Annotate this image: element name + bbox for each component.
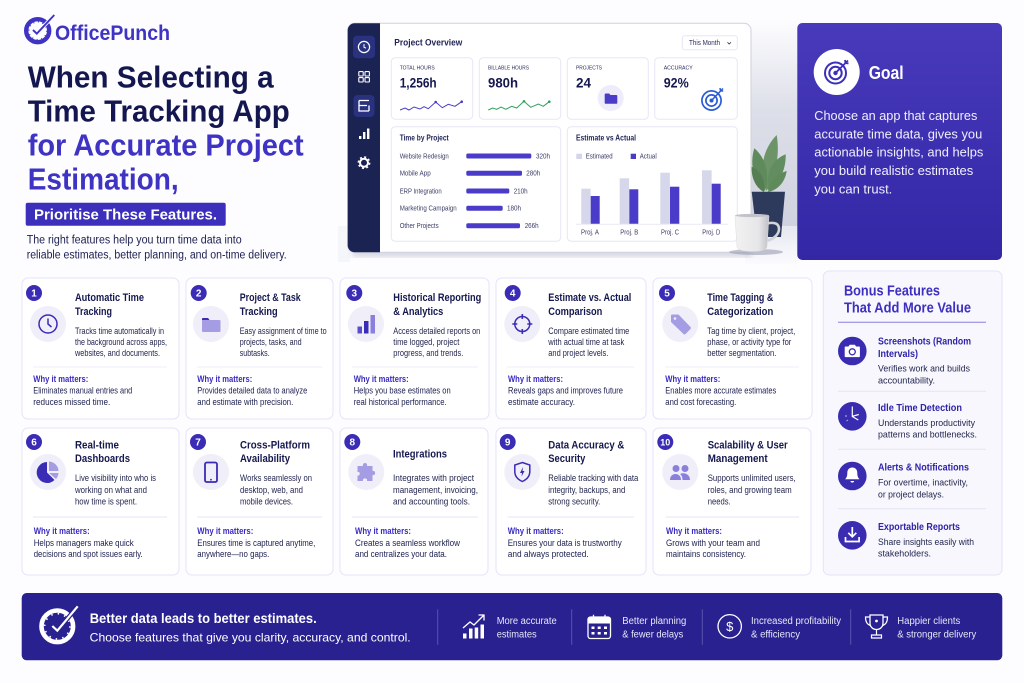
feature card 6: real-time dashboards: Real-time	[75, 440, 119, 452]
feature card 7: cross-platform: Availability	[240, 453, 291, 465]
feature card 2: project and task tracking: Why it matters:	[197, 374, 252, 384]
feature card 5: time tagging: phase, or activity type for	[707, 337, 791, 347]
panel: goal	[797, 23, 1002, 260]
feature card 2: project and task tracking: 2	[196, 288, 202, 300]
feature card 6: real-time dashboards: how time is spent.	[75, 496, 137, 506]
feature card 7: cross-platform: anywhere—no gaps.	[197, 549, 269, 559]
feature card 5: time tagging: Tag time by client, project,	[707, 326, 795, 336]
feature card 2: project and task tracking: Project & Task	[240, 292, 301, 304]
feature card 8: integrations: Integrations	[393, 449, 447, 461]
feature card 1: automatic time tracking: Tracks time automatically in	[75, 326, 164, 336]
feature card 8: integrations: and centralizes your data.	[355, 549, 447, 559]
feature card 6: real-time dashboards: Why it matters:	[34, 526, 90, 536]
feature card 5: time tagging: 5	[664, 288, 670, 300]
feature card 9: data accuracy and security: 9	[505, 438, 511, 448]
chart: estimate vs actual: Proj. A	[581, 229, 599, 236]
bonus item: idle time detection	[838, 402, 977, 440]
feature card 5: time tagging	[653, 278, 812, 419]
chart: estimate vs actual: Proj. B	[620, 229, 639, 236]
feature card 4: estimate vs actual: 4	[510, 288, 516, 300]
feature card 3: historical reporting: Helps you base estimates on	[354, 386, 451, 396]
footer message	[90, 611, 411, 645]
feature card 10: scalability and user management: 10	[660, 438, 670, 448]
bonus item: screenshots	[838, 336, 971, 386]
panel: goal: you build realistic estimates	[814, 163, 974, 178]
icon: goal target	[814, 49, 860, 95]
feature card 6: real-time dashboards: Live visibility into who is	[75, 473, 157, 483]
feature card 7: cross-platform: Cross-Platform	[240, 440, 310, 452]
feature card 7: cross-platform: 7	[195, 438, 201, 448]
chart: time by project: 320h	[536, 153, 550, 160]
feature card 2: project and task tracking: Tracking	[240, 306, 278, 318]
subtitle badge: Prioritise These Features.	[34, 206, 217, 223]
footer banner	[22, 593, 1002, 660]
feature card 10: scalability and user management: Why it matters:	[666, 526, 722, 536]
feature card 7: cross-platform	[186, 428, 333, 575]
KPI: accuracy: 92%	[664, 75, 689, 91]
panel: bonus features	[823, 271, 1002, 575]
feature card 4: estimate vs actual: with actual time at task	[547, 337, 625, 347]
KPI: billable hours	[479, 58, 561, 119]
title: Time Tracking App	[28, 94, 290, 129]
feature card 2: project and task tracking: and estimate with precision.	[197, 397, 293, 407]
feature card 6: real-time dashboards: decisions and spot issues early.	[34, 549, 143, 559]
KPI: billable hours: 980h	[488, 75, 518, 91]
chart: estimate vs actual: Proj. C	[661, 229, 679, 236]
benefit: increased profitability: $	[726, 619, 734, 634]
feature card 1: automatic time tracking: reduces missed time.	[33, 397, 110, 407]
feature card 6: real-time dashboards: Helps managers make quick	[34, 538, 134, 548]
dashboard header: Project Overview	[394, 38, 463, 48]
chart: estimate vs actual	[567, 127, 737, 241]
feature card 3: historical reporting	[340, 278, 489, 419]
KPI: billable hours: BILLABLE HOURS	[488, 66, 529, 72]
feature card 2: project and task tracking: subtasks.	[240, 348, 270, 358]
benefit: better planning: & fewer delays	[622, 630, 683, 641]
feature card 10: scalability and user management: maintains consistency.	[666, 549, 746, 559]
benefit: happier clients	[866, 615, 976, 641]
feature card 8: integrations: Integrates with project	[393, 473, 475, 483]
KPI: projects: PROJECTS	[576, 66, 602, 72]
feature card 10: scalability and user management: roles, and growing team	[708, 485, 792, 495]
feature card 6: real-time dashboards	[22, 428, 179, 575]
sidebar	[348, 23, 380, 252]
KPI: total hours: 1,256h	[400, 75, 437, 91]
feature card 5: time tagging: Categorization	[707, 306, 774, 318]
panel: goal: actionable insights, and helps	[814, 145, 984, 160]
benefit: increased profitability	[718, 615, 841, 641]
chart: time by project: Mobile App	[400, 171, 431, 178]
feature card 10: scalability and user management: Grows with your team and	[666, 538, 760, 548]
chart: time by project: Marketing Campaign	[400, 206, 457, 213]
feature card 5: time tagging: Time Tagging &	[707, 292, 773, 304]
feature card 8: integrations: Creates a seamless workflow	[355, 538, 460, 548]
chart: time by project: Time by Project	[400, 133, 449, 143]
feature card 9: data accuracy and security: integrity, backups, and	[548, 485, 625, 495]
logo: OfficePunch	[26, 15, 170, 45]
bonus item: idle time detection: Idle Time Detection	[878, 403, 962, 414]
bonus heading	[844, 284, 971, 316]
feature card 8: integrations: management, invoicing,	[393, 485, 478, 495]
feature card 2: project and task tracking	[186, 278, 333, 419]
feature card 10: scalability and user management	[653, 428, 811, 575]
bonus item: alerts	[838, 462, 969, 499]
benefit: increased profitability: Increased profitability	[751, 616, 841, 627]
icon: clock check	[42, 606, 78, 642]
feature card 9: data accuracy and security: Reliable tracking with data	[548, 473, 638, 483]
feature card 3: historical reporting: & Analytics	[393, 306, 443, 318]
title: for Accurate Project	[28, 128, 304, 163]
bonus item: alerts: Alerts & Notifications	[878, 462, 969, 473]
chart: time by project: 210h	[514, 188, 528, 195]
chart: time by project: 180h	[507, 206, 521, 213]
feature card 6: real-time dashboards: 6	[31, 438, 37, 448]
footer message: Choose features that give you clarity, accuracy, and control.	[90, 631, 411, 645]
chart: estimate vs actual: Estimated	[586, 153, 613, 160]
feature card 10: scalability and user management: Management	[708, 453, 768, 465]
KPI: accuracy: ACCURACY	[664, 66, 693, 72]
KPI: accuracy	[655, 58, 737, 119]
title: When Selecting a	[28, 59, 274, 94]
KPI: projects: 24	[576, 75, 591, 91]
intro text: The right features help you turn time data into	[27, 234, 242, 246]
feature card 1: automatic time tracking: Automatic Time	[75, 292, 144, 304]
feature card 10: scalability and user management: Supports unlimited users,	[708, 473, 796, 483]
bonus item: screenshots: Verifies work and builds	[878, 363, 970, 374]
plant	[752, 135, 787, 237]
KPI: projects	[567, 58, 648, 119]
title: Estimation,	[28, 161, 179, 196]
panel: goal: accurate time data, gives you	[814, 126, 982, 141]
dashboard window	[348, 23, 751, 252]
coffee mug	[729, 214, 783, 255]
chart: time by project: 266h	[525, 223, 539, 230]
benefit: happier clients: & stronger delivery	[897, 630, 976, 641]
feature card 8: integrations: 8	[350, 438, 356, 448]
chart: time by project: Website Redesign	[400, 153, 449, 160]
feature card 3: historical reporting: Why it matters:	[354, 374, 409, 384]
feature card 1: automatic time tracking: Tracking	[75, 306, 112, 318]
KPI: total hours	[391, 58, 473, 119]
bonus item: exportable reports	[838, 521, 974, 559]
feature card 7: cross-platform: Ensures time is captured anytime,	[197, 538, 315, 548]
feature card 5: time tagging: Enables more accurate estimates	[665, 386, 777, 396]
subtitle badge	[26, 203, 226, 226]
intro text: reliable estimates, better planning, and on-time delivery.	[27, 249, 287, 261]
feature card 6: real-time dashboards: working on what and	[74, 485, 147, 495]
chart: time by project	[391, 127, 561, 241]
feature card 1: automatic time tracking: websites, and documents.	[74, 348, 160, 358]
feature card 4: estimate vs actual: Why it matters:	[508, 374, 563, 384]
benefit: better planning: Better planning	[622, 616, 686, 627]
feature card 4: estimate vs actual: Comparison	[548, 306, 603, 318]
feature card 3: historical reporting: real historical performance.	[354, 397, 447, 407]
feature card 7: cross-platform: mobile devices.	[240, 496, 293, 506]
bonus heading: That Add More Value	[844, 300, 971, 316]
bonus item: idle time detection: Understands productivity	[878, 417, 975, 428]
feature card 1: automatic time tracking: 1	[31, 288, 37, 300]
bonus item: screenshots: Intervals)	[878, 349, 918, 360]
feature card 4: estimate vs actual: and project levels.	[548, 348, 608, 358]
feature card 5: time tagging: and cost forecasting.	[665, 397, 736, 407]
feature card 7: cross-platform: Works seamlessly on	[240, 473, 312, 483]
feature card 10: scalability and user management: needs.	[708, 496, 731, 506]
bonus item: exportable reports: stakeholders.	[878, 548, 931, 559]
bonus item: idle time detection: patterns and bottlenecks.	[878, 429, 977, 440]
chart: time by project: ERP Integration	[400, 188, 442, 195]
feature card 1: automatic time tracking: Eliminates manual entries and	[33, 386, 132, 396]
feature card 3: historical reporting: 3	[352, 288, 358, 300]
feature card 8: integrations: Why it matters:	[355, 526, 411, 536]
feature card 4: estimate vs actual: Compare estimated time	[548, 326, 629, 336]
intro text	[27, 234, 287, 261]
chart: time by project: Other Projects	[400, 223, 439, 230]
title	[28, 59, 304, 196]
feature card 4: estimate vs actual	[496, 278, 646, 419]
feature card 7: cross-platform: desktop, web, and	[240, 485, 303, 495]
benefit: more accurate estimates: estimates	[497, 630, 537, 641]
feature card 9: data accuracy and security: Ensures your data is trustworthy	[508, 538, 622, 548]
feature card 3: historical reporting: progress, and trends.	[393, 348, 463, 358]
benefit: happier clients: Happier clients	[897, 616, 960, 627]
chart: estimate vs actual: Proj. D	[702, 229, 720, 236]
footer message: Better data leads to better estimates.	[90, 611, 317, 626]
feature card 2: project and task tracking: projects, tasks, and	[240, 337, 302, 347]
feature card 1: automatic time tracking: the background across apps,	[75, 337, 167, 347]
feature card 4: estimate vs actual: Reveals gaps and improves future	[508, 386, 623, 396]
feature card 1: automatic time tracking: Why it matters:	[33, 374, 88, 384]
panel: goal: Goal	[869, 63, 904, 83]
month dropdown	[682, 36, 737, 50]
logo: OfficePunch: OfficePunch	[55, 22, 170, 45]
bonus item: alerts: For overtime, inactivity,	[878, 476, 968, 487]
feature card 9: data accuracy and security: Security	[548, 453, 586, 465]
bonus item: screenshots: accountability.	[878, 375, 935, 386]
feature card 9: data accuracy and security: and always protected.	[508, 549, 589, 559]
bonus heading: Bonus Features	[844, 284, 940, 300]
chart: time by project: 280h	[526, 171, 540, 178]
feature card 2: project and task tracking: Provides detailed data to analyze	[197, 386, 307, 396]
feature card 3: historical reporting: Historical Reporting	[393, 292, 481, 304]
feature card 9: data accuracy and security: Data Accuracy &	[548, 440, 624, 452]
feature card 8: integrations: and accounting tools.	[393, 496, 470, 506]
benefit: increased profitability: & efficiency	[751, 630, 800, 641]
bonus item: screenshots: Screenshots (Random	[878, 336, 971, 347]
feature card 6: real-time dashboards: Dashboards	[75, 453, 130, 465]
chart: estimate vs actual: Actual	[640, 153, 657, 160]
feature card 8: integrations	[340, 428, 488, 575]
feature card 10: scalability and user management: Scalability & User	[708, 440, 788, 452]
bonus item: exportable reports: Share insights easily with	[878, 536, 974, 547]
feature card 5: time tagging: Why it matters:	[665, 374, 720, 384]
feature card 1: automatic time tracking	[22, 278, 179, 419]
feature card 5: time tagging: better segmentation.	[707, 348, 776, 358]
feature card 3: historical reporting: time logged, project	[393, 337, 460, 347]
panel: goal: you can trust.	[814, 181, 892, 196]
feature card 4: estimate vs actual: Estimate vs. Actual	[548, 292, 631, 304]
benefit: better planning	[588, 615, 686, 641]
panel: goal: Choose an app that captures	[814, 108, 978, 123]
feature card 9: data accuracy and security: Why it matters:	[508, 526, 564, 536]
feature card 4: estimate vs actual: estimate accuracy.	[508, 397, 575, 407]
feature card 7: cross-platform: Why it matters:	[197, 526, 253, 536]
benefit: more accurate estimates: More accurate	[497, 616, 557, 627]
feature card 9: data accuracy and security: strong security.	[548, 496, 600, 506]
benefit: more accurate estimates	[463, 615, 557, 641]
feature card 9: data accuracy and security	[496, 428, 646, 575]
feature card 3: historical reporting: Access detailed reports on	[393, 326, 480, 336]
feature card 2: project and task tracking: Easy assignment of time to	[240, 326, 327, 336]
bonus item: exportable reports: Exportable Reports	[878, 522, 960, 533]
month dropdown: This Month	[689, 40, 720, 47]
KPI: total hours: TOTAL HOURS	[400, 66, 435, 72]
backdrop: wall and floor	[338, 20, 798, 264]
bonus item: alerts: or project delays.	[878, 488, 944, 499]
chart: estimate vs actual: Estimate vs Actual	[576, 133, 636, 143]
